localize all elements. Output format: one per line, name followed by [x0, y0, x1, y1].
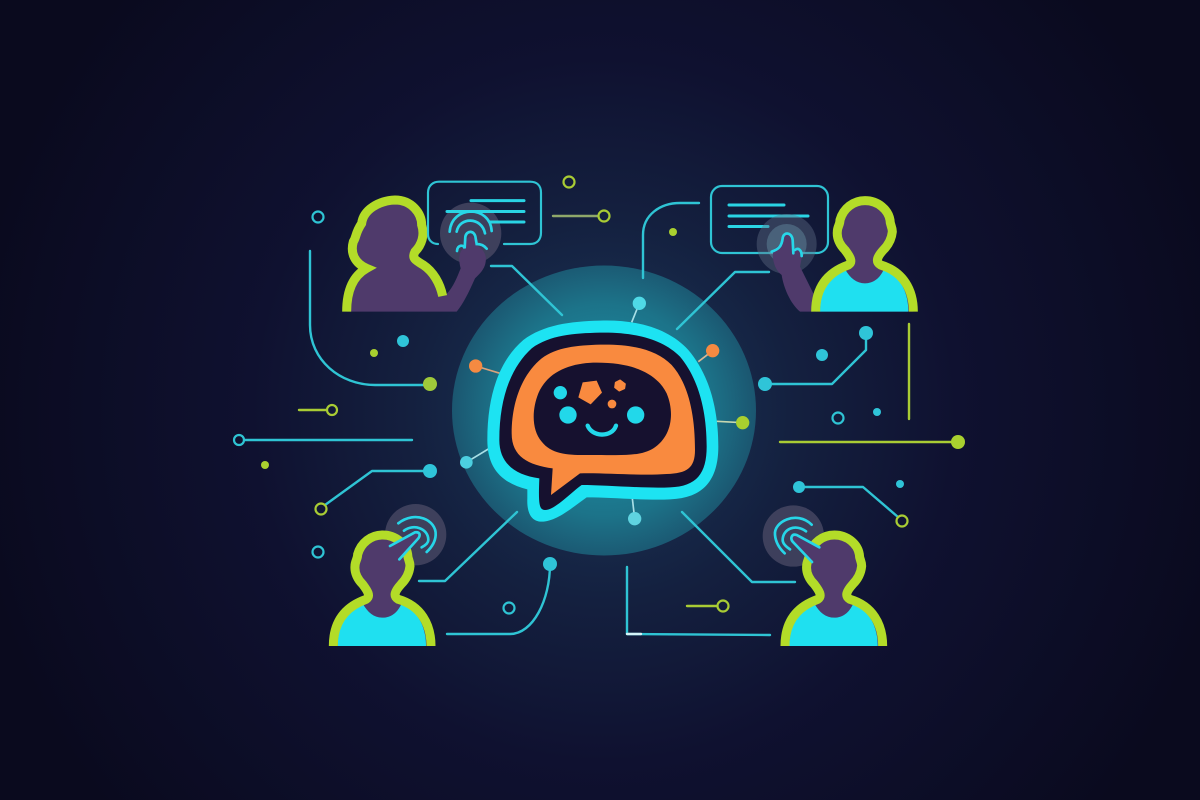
person: upper right tapping message	[757, 201, 913, 312]
arm	[773, 234, 813, 312]
person: lower left with signal gesture	[333, 504, 446, 646]
circuit connector lines	[244, 203, 898, 635]
person: upper left tapping fingerprint	[347, 182, 541, 312]
central chat bubble with pins	[460, 297, 749, 525]
figure	[816, 201, 913, 312]
pointing finger	[791, 535, 819, 562]
person: lower right with signal gesture	[763, 505, 883, 646]
touch halo	[763, 505, 824, 567]
bubble orange band	[512, 345, 695, 495]
message box over the halo	[428, 182, 541, 244]
central glow halo	[452, 266, 756, 556]
fingerprint arcs	[450, 212, 492, 251]
smiling face with shapes	[554, 380, 644, 435]
figure	[333, 535, 431, 646]
touch halo	[385, 504, 446, 565]
bubble inner screen	[534, 363, 671, 455]
scattered dots and rings	[234, 176, 965, 614]
arm and body	[347, 200, 486, 312]
bubble cyan outline	[487, 321, 718, 522]
upper-right message box	[711, 186, 828, 253]
pointing finger	[390, 532, 420, 559]
bubble pins	[460, 297, 749, 525]
touch halo	[440, 203, 501, 264]
signal arcs	[390, 517, 436, 559]
lime connector lines	[299, 216, 958, 606]
lime outline	[347, 200, 443, 312]
finger outline	[772, 234, 802, 256]
signal arcs	[775, 518, 819, 562]
touch halo	[757, 214, 817, 274]
bubble dark ring	[499, 333, 707, 510]
figure	[785, 535, 883, 646]
